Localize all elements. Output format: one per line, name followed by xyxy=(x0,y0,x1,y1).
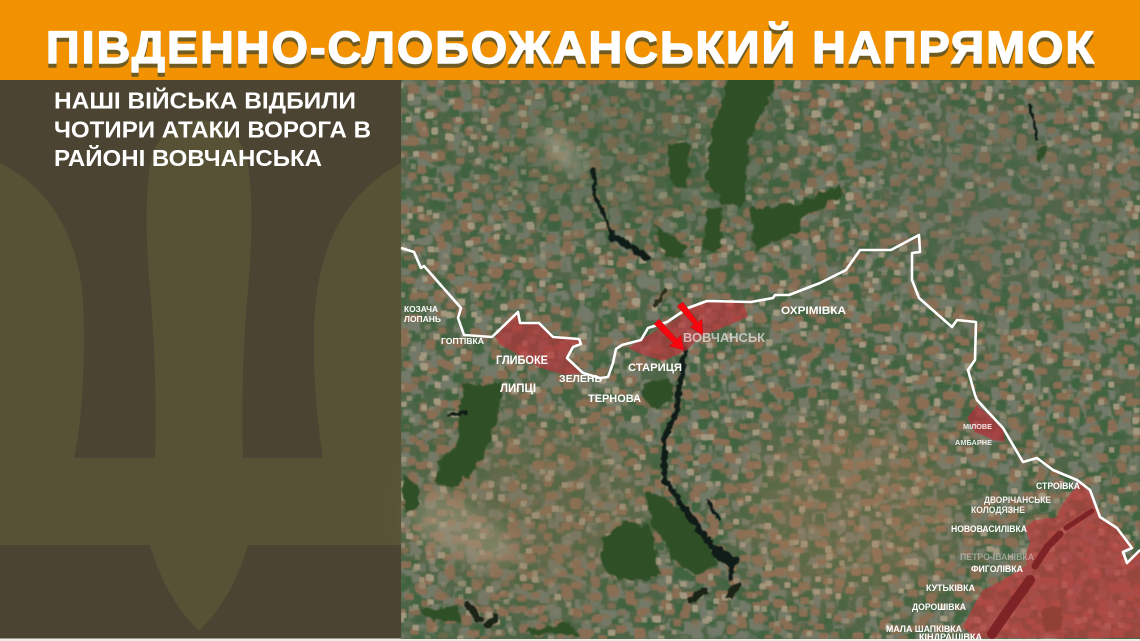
label: Fyholivka: ФИГОЛІВКА xyxy=(971,564,1023,574)
label: Dvorichanske: ДВОРІЧАНСЬКЕ xyxy=(984,495,1051,505)
label: Kozacha Lopan xyxy=(404,305,441,324)
map forests xyxy=(403,78,1062,634)
bottom edge strip xyxy=(0,638,1140,641)
title banner xyxy=(0,0,1140,80)
map rivers and reservoirs xyxy=(448,104,1037,625)
label: Lyptsi: ЛИПЦІ xyxy=(500,383,536,395)
panel: left olive panel xyxy=(0,80,401,638)
state border line xyxy=(401,235,1140,563)
place labels xyxy=(404,305,1080,641)
map light settlement: Kharkiv outskirts xyxy=(410,490,515,565)
icon: trident watermark xyxy=(0,120,401,631)
label: Milove: МІЛОВЕ xyxy=(963,422,992,431)
label: Kozacha Lopan: ЛОПАНЬ xyxy=(404,315,441,324)
panel: satellite map xyxy=(401,78,1140,639)
occupied zone: Vovchansk xyxy=(628,301,748,361)
label: Okhrimivka: ОХРІМІВКА xyxy=(781,305,846,317)
label: Petro-Ivanivka: ПЕТРО-ІВАНІВКА xyxy=(960,552,1034,562)
label: Doroshivka: ДОРОШІВКА xyxy=(912,602,966,612)
dark river strip inside zone xyxy=(992,511,1092,634)
occupied zone: Hlyboke xyxy=(495,312,583,375)
subtitle text: ЧОТИРИ АТАКИ ВОРОГА В xyxy=(54,116,371,142)
arrow: attack one xyxy=(654,319,684,350)
subtitle text xyxy=(54,86,371,171)
subtitle text: РАЙОНІ ВОВЧАНСЬКА xyxy=(54,144,322,171)
label: Hlyboke: ГЛИБОКЕ xyxy=(496,355,548,367)
label: Vovchansk: ВОВЧАНСЬК xyxy=(683,330,765,345)
label: Kutkivka: КУТЬКІВКА xyxy=(926,583,975,593)
label: Starytsia: СТАРИЦЯ xyxy=(628,362,682,374)
title: ПІВДЕННО-СЛОБОЖАНСЬКИЙ НАПРЯМОК xyxy=(46,22,1096,73)
label: Mala Shapkivka: МАЛА ШАПКІВКА xyxy=(886,624,962,634)
occupied zone: south-east xyxy=(963,482,1140,638)
map field texture xyxy=(401,80,1140,639)
label: Ambarne: АМБАРНЕ xyxy=(955,438,992,447)
subtitle text: НАШІ ВІЙСЬКА ВІДБИЛИ xyxy=(54,86,356,114)
label: Kozacha Lopan: КОЗАЧА xyxy=(404,305,438,314)
label: Ternova: ТЕРНОВА xyxy=(588,393,641,405)
label: Zelen: ЗЕЛЕНЬ xyxy=(559,373,602,385)
map regional tone xyxy=(420,90,1120,600)
title shadow: ПІВДЕННО-СЛОБОЖАНСЬКИЙ НАПРЯМОК xyxy=(46,26,1096,77)
label: Novovasylivka: НОВОВАСИЛІВКА xyxy=(951,524,1027,534)
label: Hoptivka: ГОПТІВКА xyxy=(441,337,484,346)
label: Stroivka: СТРОЇВКА xyxy=(1036,481,1080,491)
label: Kolodiazne: КОЛОДЯЗНЕ xyxy=(971,505,1025,515)
occupied zone: Milove xyxy=(967,405,1005,442)
arrow: attack two xyxy=(677,302,703,335)
map light settlement: north town xyxy=(535,128,590,172)
